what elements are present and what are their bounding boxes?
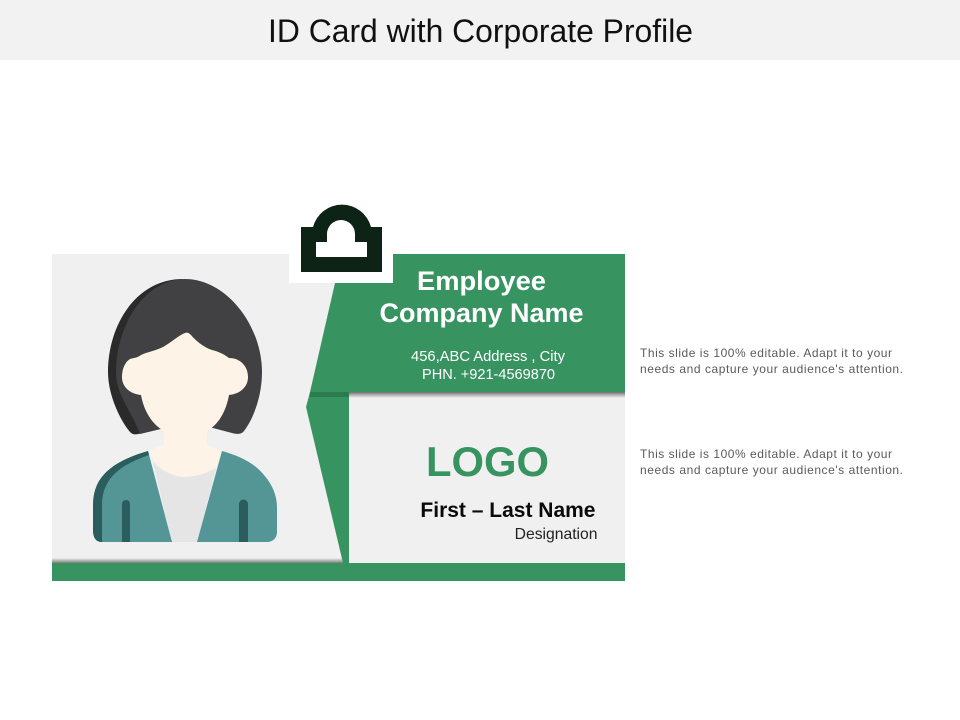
designation: Designation (515, 526, 598, 543)
text block: note one: This slide is 100% editable. Adapt it to your (640, 346, 892, 360)
panel: green company header: Employee (417, 266, 546, 296)
bottom green band (52, 563, 625, 581)
text block: note two: This slide is 100% editable. Adapt it to your (640, 447, 892, 461)
shirt (153, 462, 216, 542)
jacket left shadow (93, 451, 149, 542)
text block: note two: needs and capture your audience's attention. (640, 463, 903, 477)
panel: green company header (310, 254, 625, 392)
header shadow on strip (310, 392, 349, 397)
logo text: LOGO (426, 438, 549, 485)
hair (108, 279, 183, 434)
jacket right (197, 451, 277, 542)
green diagonal strip (306, 392, 349, 563)
icon: lanyard clip (301, 205, 382, 272)
portrait: woman avatar (93, 279, 277, 542)
text block: note one (640, 346, 903, 376)
name: First – Last Name (420, 499, 596, 522)
panel: ID card (52, 205, 625, 581)
sleeve lines (122, 500, 130, 542)
panel: green company header: PHN. +921-4569870 (422, 367, 555, 383)
face and ears (122, 333, 248, 477)
text block: note two (640, 447, 903, 477)
jacket left (93, 451, 172, 542)
shadow under header (349, 392, 625, 398)
title bar (0, 0, 960, 60)
panel: green company header: Company Name (380, 298, 584, 328)
white notch behind icon (289, 225, 393, 283)
shadow above bottom band (52, 558, 343, 563)
card background (52, 254, 625, 563)
panel: green company header: 456,ABC Address , City (411, 349, 566, 365)
title bar: ID Card with Corporate Profile (268, 13, 693, 49)
text block: note one: needs and capture your audience's attention. (640, 362, 903, 376)
